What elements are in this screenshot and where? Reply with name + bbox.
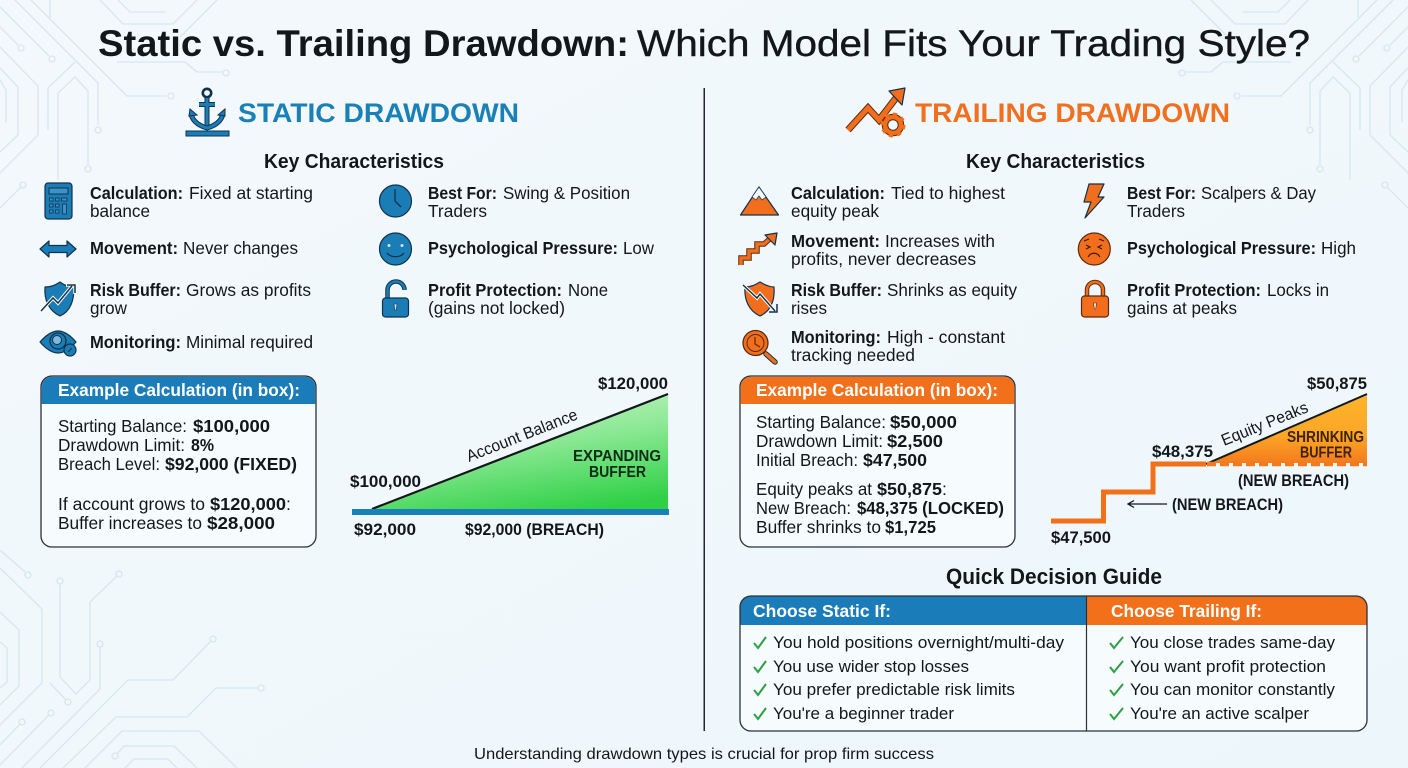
icon: magnifier with clock: [743, 330, 775, 362]
item: movement: Increases with: [885, 231, 995, 251]
chart: expanding buffer: $92,000 (BREACH): [465, 520, 604, 539]
item: profit protection: gains at peaks: [1127, 298, 1237, 318]
list: choose trailing: You can monitor constantly: [1130, 680, 1335, 699]
box figures: Starting Balance:: [58, 416, 187, 436]
item: best for: Traders: [428, 201, 487, 221]
icon: lightning bolt: [1084, 184, 1104, 218]
item: psychological pressure: High: [1321, 238, 1356, 258]
item: calculation: Calculation:: [90, 183, 183, 203]
list: choose static: You use wider stop losses: [773, 657, 969, 676]
item: calculation: Fixed at starting: [189, 183, 313, 203]
title: [98, 23, 1310, 64]
box figures: :: [942, 479, 947, 499]
chart: shrinking buffer: SHRINKING: [1287, 429, 1364, 446]
box figures: $48,375 (LOCKED): [857, 498, 1004, 518]
item: monitoring: Monitoring:: [791, 327, 881, 347]
icon: double arrow: [40, 241, 76, 257]
box figures: $120,000: [210, 494, 286, 514]
item: psychological pressure: Psychological Pressure:: [1127, 238, 1316, 258]
icon: shield with falling arrow: [743, 282, 777, 316]
icon: worried face: [1078, 233, 1110, 265]
icon: clock: [380, 185, 412, 217]
box heading: Example Calculation (in box):: [756, 380, 998, 400]
chart: expanding buffer: $100,000: [350, 472, 421, 491]
chart: shrinking buffer: Equity Peaks: [1219, 399, 1311, 450]
checks: [754, 637, 1123, 719]
item: risk buffer: [90, 280, 311, 318]
list: choose static: You prefer predictable risk limits: [773, 680, 1015, 699]
item: best for: Swing & Position: [503, 183, 630, 203]
item: best for: [428, 183, 630, 221]
column heading: trailing: Choose Trailing If:: [1111, 601, 1262, 621]
item: risk buffer: Risk Buffer:: [90, 280, 181, 300]
item: movement: Movement:: [90, 238, 178, 258]
box figures: $100,000: [193, 416, 270, 436]
list: choose trailing: You close trades same-day: [1130, 633, 1335, 652]
item: monitoring: Monitoring:: [90, 332, 181, 352]
box figures: If account grows to: [58, 494, 205, 514]
title: Static vs. Trailing Drawdown:: [98, 23, 629, 64]
box figures: $50,000: [890, 412, 957, 432]
icon: rising stairs arrow: [741, 233, 777, 265]
icon: calculator: [45, 183, 72, 219]
item: risk buffer: grow: [90, 298, 127, 318]
item: psychological pressure: Psychological Pressure:: [428, 238, 618, 258]
heading: key characteristics: Key Characteristics: [264, 151, 444, 173]
item: best for: [1127, 183, 1316, 221]
icon: smiley face: [380, 233, 412, 265]
icon: mountain: [740, 187, 778, 215]
chart: shrinking buffer: BUFFER: [1300, 444, 1352, 462]
list: choose static: You're a beginner trader: [773, 704, 954, 723]
box heading: Example Calculation (in box):: [58, 380, 300, 400]
item: movement: [90, 238, 298, 258]
heading: trailing drawdown: TRAILING DRAWDOWN: [915, 98, 1230, 128]
box figures: [756, 412, 1004, 537]
item: psychological pressure: Low: [623, 238, 654, 258]
box figures: $92,000 (FIXED): [165, 454, 297, 474]
box figures: $47,500: [863, 450, 927, 470]
icon: eye with gauge: [40, 331, 76, 356]
box figures: Buffer shrinks to: [756, 517, 881, 537]
box figures: Starting Balance:: [756, 412, 886, 432]
heading: static drawdown: STATIC DRAWDOWN: [238, 98, 519, 128]
item: movement: [791, 231, 995, 269]
item: calculation: [791, 183, 1005, 221]
box figures: $1,725: [885, 517, 936, 537]
icon: shield with rising chart: [41, 282, 75, 316]
item: monitoring: Minimal required: [186, 332, 313, 352]
chart: shrinking buffer: [1051, 374, 1367, 547]
item: best for: Best For:: [1127, 183, 1196, 203]
list: choose static: [773, 633, 1065, 723]
item: risk buffer: Risk Buffer:: [791, 280, 882, 300]
chart: shrinking buffer: (NEW BREACH): [1238, 471, 1349, 490]
item: risk buffer: [791, 280, 1017, 318]
item: best for: Traders: [1127, 201, 1185, 221]
item: monitoring: [791, 327, 1005, 365]
item: calculation: Tied to highest: [891, 183, 1005, 203]
item: movement: Movement:: [791, 231, 880, 251]
item: best for: Scalpers & Day: [1201, 183, 1316, 203]
title: Which Model Fits Your Trading Style?: [637, 23, 1310, 64]
footer note: Understanding drawdown types is crucial for prop firm success: [474, 746, 934, 763]
item: calculation: balance: [90, 201, 150, 221]
box figures: Breach Level:: [58, 454, 160, 474]
item: monitoring: [90, 332, 313, 352]
box figures: :: [286, 494, 291, 514]
icon: rising arrow with gear: [848, 88, 905, 136]
item: calculation: Calculation:: [791, 183, 885, 203]
list: choose static: You hold positions overnight/multi-day: [773, 633, 1065, 652]
item: monitoring: High - constant: [887, 327, 1005, 347]
box figures: $28,000: [207, 513, 275, 533]
column heading: static: Choose Static If:: [753, 601, 891, 621]
box figures: New Breach:: [756, 498, 851, 518]
chart: shrinking buffer: $47,500: [1051, 528, 1111, 547]
item: risk buffer: rises: [791, 298, 827, 318]
box figures: Drawdown Limit:: [58, 435, 185, 455]
item: profit protection: None: [568, 280, 608, 300]
box figures: Initial Breach:: [756, 450, 858, 470]
item: movement: Never changes: [183, 238, 298, 258]
box figures: Equity peaks at: [756, 479, 872, 499]
item: calculation: equity peak: [791, 201, 879, 221]
icon: closed padlock: [1082, 282, 1108, 317]
item: movement: profits, never decreases: [791, 249, 976, 269]
item: profit protection: Profit Protection:: [428, 280, 562, 300]
chart: expanding buffer: $120,000: [598, 374, 668, 393]
chart: expanding buffer: Account Balance: [464, 406, 580, 466]
box figures: Buffer increases to: [58, 513, 202, 533]
chart: shrinking buffer: (NEW BREACH): [1172, 495, 1283, 514]
list: choose trailing: [1130, 633, 1335, 723]
icon: open padlock: [382, 282, 408, 317]
icon: anchor: [186, 89, 229, 136]
panel: static drawdown: [40, 89, 669, 547]
chart: expanding buffer: $92,000: [354, 520, 416, 539]
item: monitoring: tracking needed: [791, 345, 915, 365]
item: risk buffer: Shrinks as equity: [887, 280, 1017, 300]
box figures: [58, 416, 297, 533]
box figures: $2,500: [887, 431, 943, 451]
example calculation box: [740, 376, 1015, 547]
box figures: $50,875: [877, 479, 942, 499]
chart: shrinking buffer: $48,375: [1152, 442, 1213, 461]
item: profit protection: Locks in: [1267, 280, 1329, 300]
list: choose trailing: You're an active scalper: [1130, 704, 1309, 723]
heading: quick decision guide: Quick Decision Guide: [946, 564, 1162, 589]
box figures: Drawdown Limit:: [756, 431, 883, 451]
chart: expanding buffer: [350, 374, 669, 539]
item: profit protection: [428, 280, 608, 318]
heading: key characteristics: Key Characteristics: [966, 151, 1145, 173]
item: best for: Best For:: [428, 183, 497, 203]
box figures: 8%: [191, 435, 214, 455]
chart: shrinking buffer: $50,875: [1307, 374, 1367, 393]
item: calculation: [90, 183, 313, 221]
list: choose trailing: You want profit protection: [1130, 657, 1326, 676]
item: risk buffer: Grows as profits: [186, 280, 311, 300]
panel: decision table: [740, 596, 1367, 731]
item: profit protection: [1127, 280, 1329, 318]
center divider: [704, 88, 705, 731]
item: profit protection: (gains not locked): [428, 298, 565, 318]
chart: expanding buffer: EXPANDING: [573, 448, 661, 465]
panel: trailing drawdown: [740, 88, 1367, 731]
chart: expanding buffer: BUFFER: [589, 464, 646, 481]
item: profit protection: Profit Protection:: [1127, 280, 1261, 300]
example calculation box: [41, 376, 316, 547]
